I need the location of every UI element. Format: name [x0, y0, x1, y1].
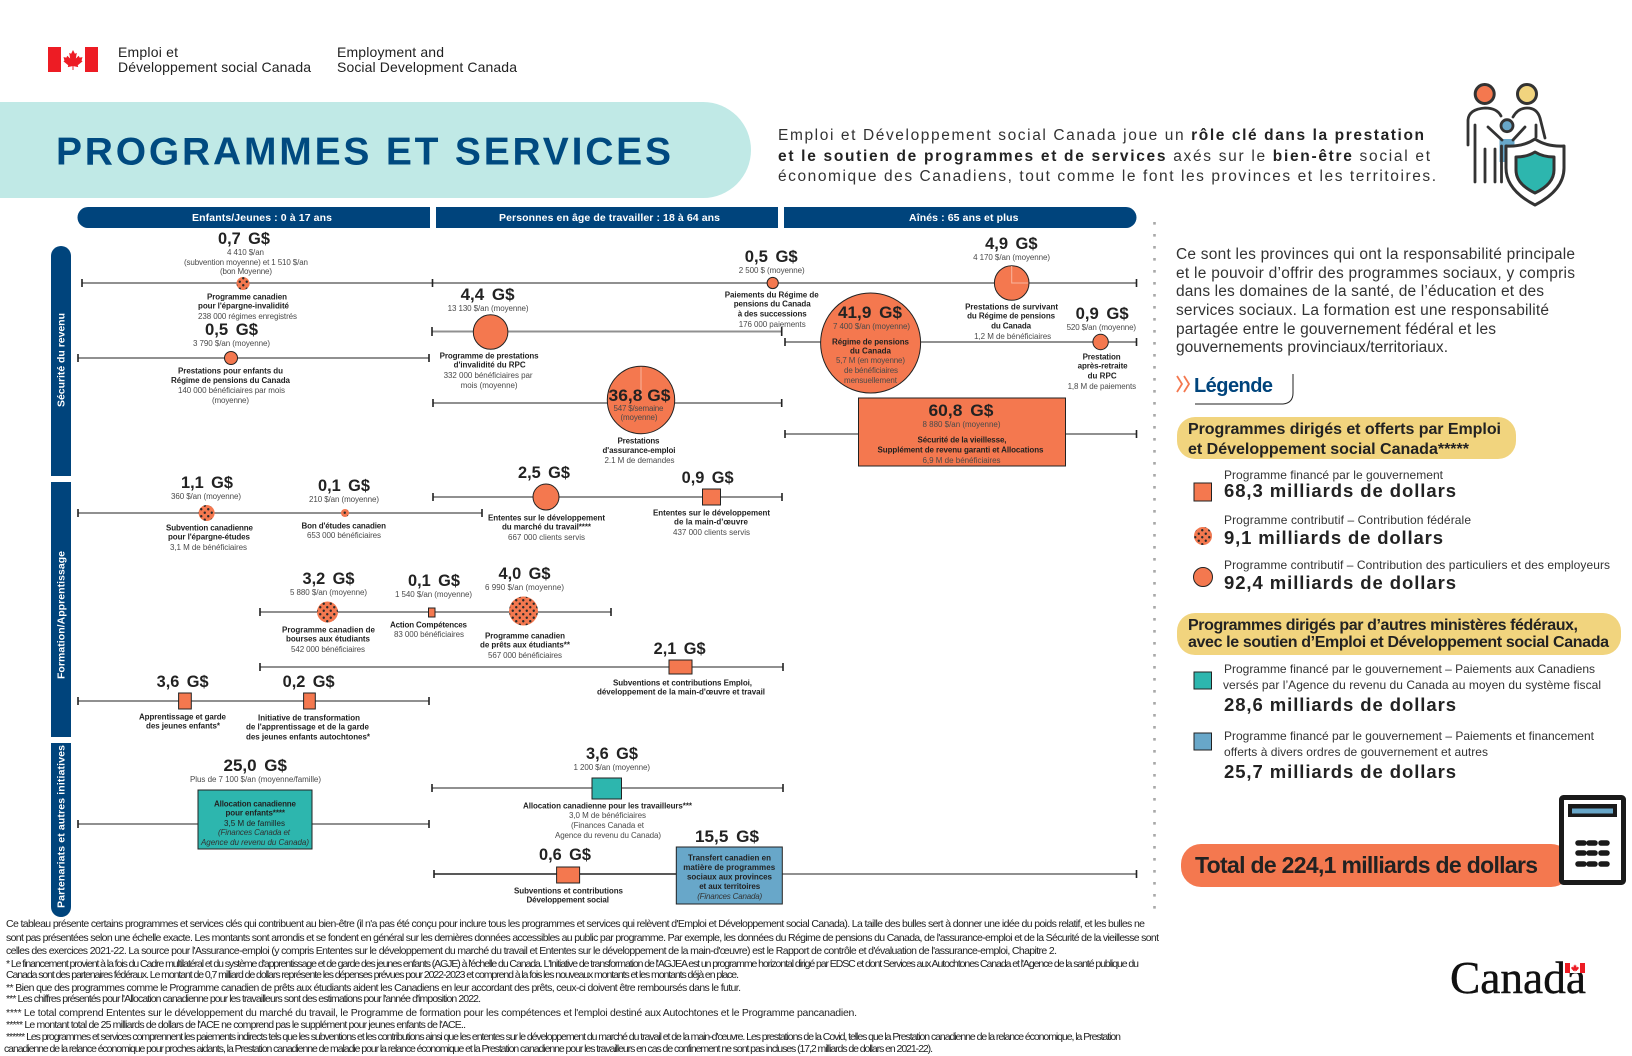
- program: CPP death benefits: à des successions: [738, 310, 807, 318]
- program: Workforce Development Agreements: de la main-d'œuvre: [674, 518, 749, 526]
- program: Canada Education Savings Grant: pour l'épargne-études: [168, 532, 251, 542]
- legend item: government funded: [1194, 468, 1456, 501]
- swatch: [1194, 527, 1212, 545]
- program: Workforce Development Agreements: [653, 468, 770, 537]
- program: CPP survivor: Prestations de survivant: [965, 302, 1058, 312]
- program: Canada Pension Plan: 7 400 $/an (moyenne): [833, 322, 910, 331]
- program: CPP children's benefits: [171, 320, 291, 405]
- program: Canada Student Loans: [480, 564, 571, 660]
- program: Workforce Development Agreements: Ententes sur le développement: [653, 508, 770, 518]
- icon: family and shield: [1468, 84, 1564, 205]
- program: Canada Child Benefit: (Finances Canada et: [218, 828, 291, 837]
- section label: training and apprenticeship: [51, 482, 71, 737]
- footnotes: [4, 918, 1159, 1055]
- program: Canada Education Savings Grant: 3,1 M de bénéficiaires: [170, 543, 247, 552]
- program: Canada Learning Bond: [302, 476, 386, 540]
- Canada wordmark: Canada: [1450, 952, 1586, 1003]
- program: Canada Education Savings Grant: 1,1 G$: [181, 473, 234, 492]
- legend item: tax system payments: Programme financé par le gouvernement – Paiements aux Canadiens: [1224, 662, 1595, 676]
- department name in French: Développement social Canada: [118, 59, 311, 75]
- program: Employment Insurance: (moyenne): [620, 413, 658, 422]
- program: Skills Link: [390, 571, 472, 639]
- program: CPP disability: [440, 285, 539, 390]
- legend group: ESDC programs: [1177, 417, 1516, 459]
- program: Skills Link: 83 000 bénéficiaires: [394, 630, 464, 639]
- legend item: individual and employer contribution: 92,4 milliards de dollars: [1224, 572, 1456, 593]
- program: CPP disability: 13 130 $/an (moyenne): [448, 304, 529, 313]
- footnotes: ***** Le montant total de 25 milliards de dollars de l'ACE ne comprend pas le supplément pour jeunes enfants de l'ACE..: [6, 1019, 466, 1031]
- legend item: government funded: Programme financé par le gouvernement: [1224, 468, 1444, 482]
- program: Canada Disability Savings: 0,7 G$: [218, 229, 271, 248]
- program: CPP death benefits: 0,5 G$: [745, 247, 798, 266]
- footnotes: ** Bien que des programmes comme le Programme canadien de prêts aux étudiants aident les Canadiens en leur accordant des prêts, ceux-ci doivent être remboursés dans le futur.: [6, 982, 741, 994]
- legend item: individual and employer contribution: Programme contributif – Contribution des particuliers et des employeurs: [1224, 558, 1610, 572]
- program: Indigenous early learning initiative: de l'apprentissage et de la garde: [246, 722, 370, 732]
- program: Canada Student Loans: de prêts aux étudiants**: [480, 640, 571, 650]
- program: CPP post-retirement: Prestation: [1083, 352, 1121, 362]
- bubble: [236, 277, 250, 290]
- introduction text: Emploi et Développement social Canada joue un rôle clé dans la prestation: [778, 127, 1424, 144]
- text block: provincial responsibility: partagée entre le gouvernement fédéral et les: [1176, 321, 1496, 338]
- program: Old Age Security: 60,8 G$: [928, 401, 994, 420]
- program: CPP post-retirement: [1067, 304, 1136, 391]
- footnotes: canadienne de la relance économique pour proches aidants, la Prestation canadienne de maladie pour la relance économique et la Prestation canadienne pour les travailleurs en cas de confinement ne sont pas incluses (17,2 milliards de dollars en 2021-22).: [4, 1043, 933, 1055]
- program: Skills Link: 0,1 G$: [408, 571, 461, 590]
- program: Canada Education Savings Grant: 360 $/an (moyenne): [171, 492, 241, 501]
- program: Workforce Development Agreements: 437 000 clients servis: [673, 528, 750, 537]
- program: Canada Student Grants: [282, 569, 376, 654]
- text block: provincial responsibility: Ce sont les provinces qui ont la responsabilité principale: [1176, 246, 1575, 263]
- program: Canada Child Benefit: Allocation canadienne: [214, 800, 297, 808]
- swatch: [1194, 672, 1212, 689]
- program: CPP children's benefits: Prestations pour enfants du: [178, 366, 283, 376]
- program: CPP disability: d'invalidité du RPC: [454, 360, 526, 370]
- program: Canada Workers Benefit: 3,0 M de bénéficiaires: [569, 811, 646, 820]
- bubble: [767, 277, 778, 289]
- program: CPP survivor: 1,2 M de bénéficiaires: [974, 332, 1051, 341]
- program: CPP death benefits: pensions du Canada: [734, 300, 811, 308]
- header: seniors: [784, 207, 1136, 228]
- program: CPP post-retirement: 1,8 M de paiements: [1068, 382, 1136, 391]
- program: Canada Social Transfer: Transfert canadien en: [688, 854, 771, 862]
- program: CPP post-retirement: 0,9 G$: [1076, 304, 1129, 323]
- footnotes: ****** Les programmes et services comprennent les paiements indirects tels que les subventions et les contributions ainsi que les ententes sur le développement du marché du travail et de la main-d'œuvre. Les prestations de la Covid, telles que la Prestation canadienne de la relance économique, la Prestation: [6, 1031, 1121, 1043]
- program: Employment Insurance: d'assurance-emploi: [602, 446, 676, 455]
- footnotes: Ce tableau présente certains programmes et services clés qui contribuent au bien-être (il n'a pas été conçu pour inclure tous les programmes et services qui relèvent d'Emploi et Développement social Canada). La taille des bulles sert à donner une idée du poids relatif, et les bulles ne: [6, 918, 1145, 930]
- program: Old Age Security: 8 880 $/an (moyenne): [922, 420, 1001, 429]
- box: [198, 790, 312, 849]
- program: Canada Pension Plan: [821, 293, 921, 393]
- program: Canada Disability Savings: (subvention moyenne) et 1 510 $/an: [184, 258, 308, 267]
- program: Indigenous early learning initiative: 0,2 G$: [283, 672, 335, 691]
- title banner: [0, 102, 751, 198]
- program: Employment Insurance: [602, 366, 676, 465]
- program: CPP post-retirement: après-retraite: [1078, 362, 1128, 370]
- program: CPP survivor: du Canada: [991, 322, 1032, 330]
- program: Employment Insurance: 547 $/semaine: [614, 404, 664, 413]
- section label: partnerships: [51, 743, 71, 917]
- program: Old Age Security: Sécurité de la vieillesse,: [918, 436, 1006, 444]
- program: CPP disability: 332 000 bénéficiaires par: [444, 371, 533, 380]
- program: Old Age Security: [858, 398, 1066, 466]
- program: Employment Insurance: 36,8 G$: [608, 386, 671, 405]
- program: Canada Child Benefit: 3,5 M de familles: [224, 819, 285, 828]
- program: Canada Workers Benefit: 1 200 $/an (moyenne): [574, 763, 650, 772]
- title: PROGRAMMES ET SERVICES: [56, 130, 671, 174]
- program: Labour Market Development Agreements: 667 000 clients servis: [508, 533, 585, 542]
- program: early learning and child care: [139, 672, 227, 730]
- legend heading: Légende: [1194, 375, 1273, 397]
- legend item: payments to governments: offerts à divers ordres de gouvernement et autres: [1224, 745, 1488, 759]
- legend item: payments to governments: 25,7 milliards de dollars: [1224, 761, 1456, 782]
- legend item: federal contribution: [1194, 513, 1471, 548]
- timeline axes: [78, 279, 1136, 878]
- box: [669, 660, 692, 674]
- program: CPP survivor: [965, 234, 1058, 341]
- icon: calculator: [1562, 798, 1624, 882]
- footnotes: *** Les chiffres présentés pour l'Allocation canadienne pour les travailleurs sont des estimations pour l'année d'imposition 2022.: [6, 993, 481, 1005]
- program: Indigenous early learning initiative: Initiative de transformation: [258, 714, 360, 722]
- footnotes: Canada sont des partenaires fédéraux. Le montant de 0,7 milliard de dollars représente les dépenses prévues pour 2022-2023 et comprend à la fois les nouveaux montants et les montants déjà en place.: [6, 969, 739, 981]
- footnotes: **** Le total comprend Ententes sur le développement du marché du travail, le Programme de formation pour les compétences et l'emploi destiné aux Autochtones et le Programme pancanadien.: [6, 1007, 857, 1019]
- program: Canada Student Loans: 4,0 G$: [498, 564, 551, 583]
- program: Canada Child Benefit: Agence du revenu du Canada): [200, 838, 309, 847]
- program: Canada Student Loans: 567 000 bénéficiaires: [488, 651, 562, 660]
- introduction text: économique des Canadiens, tout comme le font les provinces et les territoires.: [778, 168, 1436, 185]
- box: [557, 867, 580, 883]
- program: grants and contributions, social development: 0,6 G$: [539, 845, 592, 864]
- program: Canada Social Transfer: et aux territoires: [699, 882, 761, 891]
- program: Canada Child Benefit: Plus de 7 100 $/an (moyenne/famille): [190, 775, 321, 784]
- text block: provincial responsibility: [1176, 246, 1575, 356]
- bubble: [473, 315, 508, 349]
- program: grants and contributions, employment: Subventions et contributions Emploi,: [613, 678, 752, 688]
- program: Canada Workers Benefit: (Finances Canada et: [571, 821, 645, 830]
- program: Canada Learning Bond: 0,1 G$: [318, 476, 371, 495]
- program: CPP survivor: du Régime de pensions: [967, 312, 1056, 320]
- program: Canada Education Savings Grant: [166, 473, 254, 552]
- introduction text: [778, 127, 1436, 185]
- legend group: other departments: [1177, 613, 1621, 655]
- program: Canada Social Transfer: [676, 827, 782, 904]
- header: children and youth: Enfants/Jeunes : 0 à 17 ans: [192, 212, 332, 224]
- program: Canada Social Transfer: (Finances Canada): [697, 892, 763, 901]
- text block: provincial responsibility: services sociaux. La formation est une responsabilité: [1176, 302, 1549, 319]
- program: Canada Student Grants: 5 880 $/an (moyenne): [290, 588, 367, 597]
- program: Canada Student Grants: Programme canadien de: [282, 626, 376, 634]
- footnotes: sont pas présentées selon une échelle exacte. Les montants sont arrondis et se fondent en général sur les dernières données accessibles au public par programme. Par exemple, les données du Régime de pensions du Canada, de l'assurance-emploi et de la Sécurité de la vieillesse sont: [6, 932, 1159, 944]
- box: [304, 693, 315, 709]
- footnotes: * Le financement provient à la fois du Cadre multilatéral et du système d'apprentissage et de garde des jeunes enfants (AGJE) à l'échelle du Canada. L'Initiative de transformation de l'AGJEA est un programme horizontal dirigé par EDSC et dont Services aux Autochtones Canada et l'Agence de la santé publique du: [6, 958, 1139, 970]
- bubble: [509, 596, 538, 626]
- program: CPP survivor: 4 170 $/an (moyenne): [973, 253, 1050, 262]
- program: Canada Child Benefit: 25,0 G$: [224, 756, 288, 775]
- department name in French: [118, 44, 311, 75]
- program: Canada Learning Bond: Bon d'études canadien: [302, 522, 386, 530]
- legend group: ESDC programs: et Développement social Canada*****: [1188, 441, 1470, 458]
- program: CPP children's benefits: 140 000 bénéficiaires par mois: [178, 386, 285, 395]
- program: Canada Student Loans: Programme canadien: [485, 632, 565, 640]
- text block: provincial responsibility: et le pouvoir d’offrir des programmes sociaux, y compris: [1176, 265, 1575, 282]
- department name in French: Emploi et: [118, 44, 178, 60]
- program: Canada Workers Benefit: Allocation canadienne pour les travailleurs***: [523, 802, 693, 810]
- program: grants and contributions, employment: 2,1 G$: [654, 639, 706, 658]
- program: Canada Child Benefit: pour enfants****: [226, 808, 286, 818]
- program: Labour Market Development Agreements: 2,5 G$: [518, 463, 571, 482]
- legend item: government funded: 68,3 milliards de dollars: [1224, 480, 1456, 501]
- program: CPP death benefits: Paiements du Régime de: [725, 290, 819, 300]
- program: Canada Student Loans: 6 990 $/an (moyenne): [485, 583, 564, 592]
- legend item: federal contribution: Programme contributif – Contribution fédérale: [1224, 513, 1471, 527]
- program: grants and contributions, employment: [597, 639, 765, 696]
- text block: provincial responsibility: gouvernements provinciaux/territoriaux.: [1176, 339, 1448, 356]
- bubble: [317, 602, 338, 622]
- header: working age: Personnes en âge de travailler : 18 à 64 ans: [499, 212, 720, 224]
- program: CPP disability: 4,4 G$: [461, 285, 515, 304]
- program: Canada Pension Plan: de bénéficiaires: [844, 366, 898, 375]
- program: early learning and child care: des jeunes enfants*: [146, 722, 221, 730]
- program: CPP death benefits: [725, 247, 819, 329]
- program: Labour Market Development Agreements: [488, 463, 605, 542]
- program: Canada Disability Savings: 4 410 $/an: [227, 248, 264, 257]
- department name in English: Employment and: [337, 44, 444, 60]
- program: CPP death benefits: 2 500 $ (moyenne): [739, 266, 805, 275]
- program: CPP children's benefits: Régime de pensions du Canada: [171, 376, 291, 385]
- program: Canada Disability Savings: [184, 229, 308, 321]
- section label: income security: Sécurité du revenu: [56, 313, 68, 407]
- box: [428, 608, 435, 617]
- introduction text: et le soutien de programmes et de services axés sur le bien-être social et: [778, 148, 1431, 165]
- program: Canada Learning Bond: 653 000 bénéficiaires: [307, 531, 381, 540]
- program: Employment Insurance: Prestations: [618, 436, 660, 446]
- legend item: tax system payments: 28,6 milliards de dollars: [1224, 694, 1456, 715]
- swatch: [1194, 568, 1212, 586]
- program: CPP post-retirement: 520 $/an (moyenne): [1067, 323, 1136, 332]
- total callout: Total de 224,1 milliards de dollars: [1195, 852, 1538, 878]
- program: Canada Disability Savings: Programme canadien: [207, 292, 287, 302]
- bubble: [533, 484, 559, 510]
- program: CPP disability: mois (moyenne): [461, 381, 518, 390]
- program: early learning and child care: Apprentissage et garde: [139, 712, 227, 722]
- header: working age: [436, 207, 778, 228]
- program: CPP children's benefits: 0,5 G$: [205, 320, 259, 339]
- bubble: [994, 266, 1029, 300]
- header: children and youth: [78, 207, 430, 228]
- swatch: [1194, 733, 1212, 750]
- program: grants and contributions, social development: Subventions et contributions: [514, 886, 624, 896]
- program: CPP children's benefits: (moyenne): [212, 396, 249, 405]
- legend heading: [1177, 374, 1293, 404]
- text block: provincial responsibility: dans les domaines de la santé, de l’éducation et des: [1176, 283, 1544, 300]
- section label: income security: [51, 246, 71, 476]
- program: Old Age Security: 6,9 M de bénéficiaires: [922, 456, 1000, 465]
- program: Canada Disability Savings: pour l'épargne-invalidité: [198, 302, 290, 310]
- program: Indigenous early learning initiative: [246, 672, 371, 742]
- program: Skills Link: Action Compétences: [390, 620, 468, 630]
- section label: partnerships: Partenariats et autres initiatives: [56, 745, 68, 908]
- legend group: other departments: avec le soutien d’Emploi et Développement social Canada: [1188, 634, 1609, 651]
- program: Canada Pension Plan: mensuellement: [844, 376, 898, 385]
- program: Employment Insurance: 2.1 M de demandes: [604, 456, 674, 465]
- legend item: payments to governments: [1194, 729, 1595, 782]
- program: Workforce Development Agreements: 0,9 G$: [682, 468, 734, 487]
- bubble: [607, 366, 675, 434]
- program: CPP disability: Programme de prestations: [440, 352, 539, 360]
- box: [592, 778, 622, 799]
- age group headers: [78, 207, 1137, 228]
- bubble: [1093, 334, 1108, 350]
- program: Canada Student Grants: 3,2 G$: [302, 569, 355, 588]
- program: CPP survivor: 4,9 G$: [985, 234, 1038, 253]
- icon: wordmark flag: [1565, 963, 1585, 973]
- program: grants and contributions, social development: [514, 845, 624, 904]
- icon: Canadian flag: [48, 47, 98, 72]
- program: Indigenous early learning initiative: des jeunes enfants autochtones*: [246, 732, 371, 742]
- program: CPP children's benefits: 3 790 $/an (moyenne): [193, 339, 270, 348]
- program: Canada Pension Plan: 5,7 M (en moyenne): [836, 356, 905, 365]
- legend group: other departments: Programmes dirigés par d’autres ministères fédéraux,: [1188, 617, 1578, 634]
- section label: training and apprenticeship: Formation/Apprentissage: [56, 551, 68, 679]
- legend item: tax system payments: [1194, 662, 1601, 715]
- bubble: [224, 352, 238, 364]
- program: Canada Student Grants: bourses aux étudiants: [286, 634, 371, 644]
- program: CPP death benefits: 176 000 paiements: [739, 320, 806, 329]
- program: Canada Student Grants: 542 000 bénéficiaires: [291, 645, 365, 654]
- program: Canada Social Transfer: 15,5 G$: [695, 827, 760, 846]
- program: Labour Market Development Agreements: Ententes sur le développement: [488, 514, 605, 522]
- swatch: [1194, 483, 1212, 501]
- program: Canada Workers Benefit: 3,6 G$: [586, 744, 639, 763]
- program: Old Age Security: Supplément de revenu garanti et Allocations: [878, 446, 1044, 454]
- bubble: [341, 509, 349, 517]
- program: Canada Disability Savings: (bon Moyenne): [220, 267, 272, 276]
- legend item: tax system payments: versés par l’Agence du revenu du Canada au moyen du système fiscal: [1223, 678, 1601, 692]
- program: grants and contributions, employment: développement de la main-d'œuvre et travail: [597, 688, 765, 696]
- legend item: payments to governments: Programme financé par le gouvernement – Paiements et financement: [1224, 729, 1595, 743]
- department name in English: [337, 44, 517, 75]
- legend item: federal contribution: 9,1 milliards de dollars: [1224, 527, 1443, 548]
- box: [676, 847, 782, 904]
- program: CPP post-retirement: du RPC: [1088, 372, 1117, 380]
- program: Canada Social Transfer: matière de programmes: [683, 863, 776, 872]
- program: Canada Workers Benefit: [523, 744, 693, 840]
- legend group: ESDC programs: Programmes dirigés et offerts par Emploi: [1188, 421, 1501, 438]
- program: Canada Social Transfer: sociaux aux provinces: [687, 872, 773, 882]
- program: early learning and child care: 3,6 G$: [157, 672, 209, 691]
- program: Canada Pension Plan: Régime de pensions: [832, 338, 910, 346]
- box: [702, 489, 720, 505]
- program: Canada Child Benefit: [190, 756, 321, 849]
- program: Labour Market Development Agreements: du marché du travail****: [502, 522, 592, 532]
- box: [179, 693, 191, 709]
- department name in English: Social Development Canada: [337, 59, 517, 75]
- bubble: [821, 293, 921, 393]
- program: Canada Education Savings Grant: Subvention canadienne: [166, 524, 254, 532]
- program: Canada Pension Plan: 41,9 G$: [838, 303, 903, 322]
- program: Skills Link: 1 540 $/an (moyenne): [395, 590, 472, 599]
- bubble: [199, 505, 215, 521]
- program: Canada Pension Plan: du Canada: [850, 346, 892, 356]
- header: seniors: Aînés : 65 ans et plus: [909, 212, 1019, 224]
- program: Canada Learning Bond: 210 $/an (moyenne): [309, 495, 379, 504]
- program: Canada Workers Benefit: Agence du revenu du Canada): [555, 831, 661, 840]
- program: Canada Disability Savings: 238 000 régimes enregistrés: [198, 312, 297, 321]
- legend item: individual and employer contribution: [1194, 558, 1610, 593]
- program: grants and contributions, social development: Développement social: [526, 896, 609, 904]
- total callout: [1181, 844, 1571, 887]
- footnotes: celles des exercices 2021-22. La source pour l'Assurance-emploi (y compris Ententes sur le développement du marché du travail et Ententes sur le développement de la main-d'œuvre) est le Rapport de contrôle et d'évaluation de l'assurance-emploi, Chapitre 2.: [6, 945, 1057, 957]
- box: [858, 398, 1066, 466]
- government of Canada signature: [48, 44, 517, 75]
